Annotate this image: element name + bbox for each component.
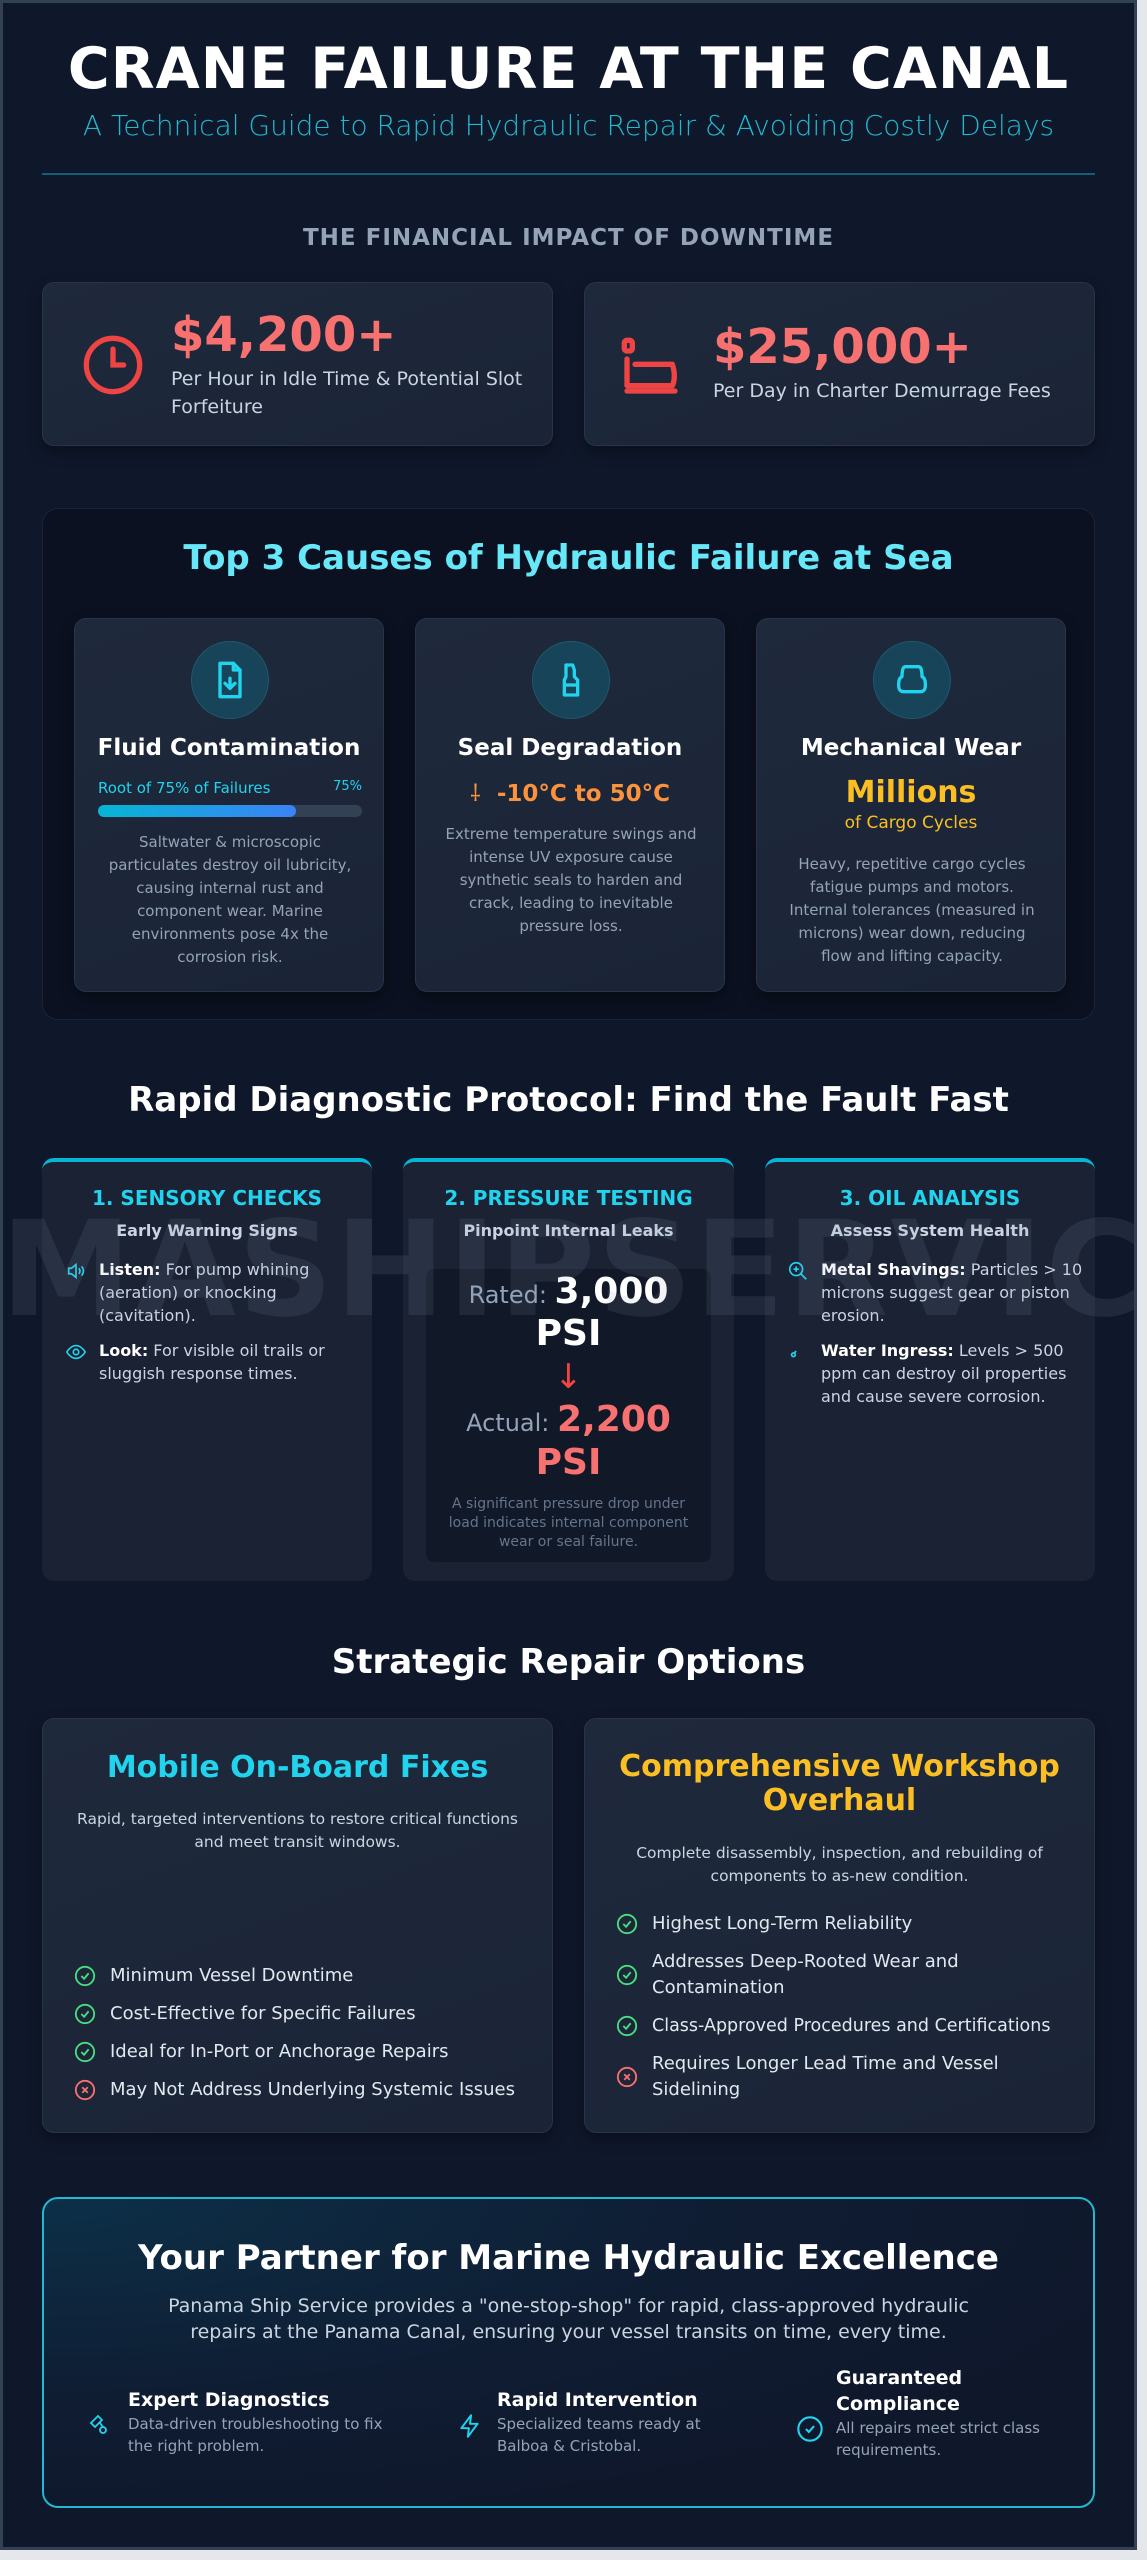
pros/cons list: [616, 1913, 1050, 2100]
stat text: [171, 307, 522, 418]
icon: bearing: [873, 641, 951, 719]
icon: file: [191, 641, 269, 719]
pros/cons list: [74, 1965, 515, 2100]
feature: intervention: Rapid Intervention: [497, 2389, 698, 2411]
pros/cons list: Addresses Deep-Rooted Wear and Contamination: [652, 1951, 959, 1998]
card: mobile fixes: Mobile On-Board Fixes: [107, 1750, 488, 1785]
pressure readings: ↓: [554, 1357, 583, 1397]
feature: diagnostics: Data-driven troubleshooting to fix the right problem.: [128, 2415, 382, 2455]
feature: intervention: [460, 2389, 701, 2455]
card: mechanical wear: Mechanical Wear: [801, 735, 1021, 761]
card: pressure testing: Pinpoint Internal Leaks: [463, 1221, 674, 1240]
feature: diagnostics: [90, 2389, 382, 2455]
progress bar: Root of 75% of Failures: [98, 779, 270, 797]
pros/cons list: Cost-Effective for Specific Failures: [110, 2003, 416, 2024]
icon: bottle: [532, 641, 610, 719]
heading: repair options: Strategic Repair Options: [332, 1642, 805, 1682]
card: pressure testing: [403, 1158, 734, 1581]
card: workshop overhaul: [584, 1718, 1095, 2133]
icon: clock: [84, 336, 142, 394]
card: workshop overhaul: Complete disassembly, inspection, and rebuilding of components to as-new condition.: [636, 1844, 1043, 1885]
heading: financial impact: THE FINANCIAL IMPACT OF DOWNTIME: [303, 225, 834, 251]
progress bar: 75%: [333, 779, 362, 794]
list: Metal Shavings: Particles > 10 microns suggest gear or piston erosion.: [821, 1260, 1082, 1325]
feature: compliance: Guaranteed Compliance: [836, 2367, 962, 2415]
feature: compliance: [797, 2367, 1040, 2459]
card: fluid contamination: Fluid Contamination: [98, 735, 360, 761]
card: mobile fixes: [42, 1718, 553, 2133]
card: mechanical wear: Heavy, repetitive cargo cycles fatigue pumps and motors. Internal tolerances (measured in microns) wear down, reducing flow and lifting capacity.: [789, 855, 1035, 965]
feature: compliance: All repairs meet strict class requirements.: [836, 2419, 1040, 2459]
progress bar: [98, 779, 362, 817]
pros/cons list: Minimum Vessel Downtime: [110, 1965, 353, 1986]
pros/cons list: Class-Approved Procedures and Certifications: [652, 2016, 1050, 2036]
card: oil analysis: Assess System Health: [831, 1221, 1029, 1240]
card: pressure testing: 2. PRESSURE TESTING: [444, 1186, 693, 1210]
list: Look: For visible oil trails or sluggish response times.: [99, 1341, 325, 1383]
stat card: hourly: [42, 282, 553, 446]
temperature range: ⸸ -10°C to 50°C: [470, 781, 670, 807]
list: [66, 1260, 325, 1383]
stat text: Per Day in Charter Demurrage Fees: [713, 380, 1051, 402]
card: fluid contamination: Saltwater & microscopic particulates destroy oil lubricity, causing internal rust and component wear. Marine environments pose 4x the corrosion risk.: [109, 833, 351, 966]
icon: ship: [622, 338, 678, 394]
feature: intervention: Specialized teams ready at Balboa & Cristobal.: [497, 2415, 701, 2455]
panel: partner: [42, 2197, 1095, 2508]
stat: millions: [845, 775, 977, 833]
pressure readings: PSI: [536, 1313, 601, 1354]
heading: Your Partner for Marine Hydraulic Excellence: [138, 2238, 999, 2278]
pros/cons list: Requires Longer Lead Time and Vessel Sidelining: [652, 2053, 999, 2100]
pressure readings: [426, 1269, 711, 1562]
intro text: Panama Ship Service provides a "one-stop-shop" for rapid, class-approved hydraulic repairs at the Panama Canal, ensuring your vessel transits on time, every time.: [168, 2295, 969, 2343]
heading: Top 3 Causes of Hydraulic Failure at Sea: [183, 538, 954, 578]
list: [788, 1260, 1082, 1406]
card: oil analysis: [765, 1158, 1095, 1581]
card: seal degradation: Extreme temperature swings and intense UV exposure cause synthetic seals to harden and crack, leading to inevitable pressure loss.: [445, 825, 697, 935]
heading: diagnostic: Rapid Diagnostic Protocol: Find the Fault Fast: [128, 1080, 1009, 1120]
card: seal degradation: [415, 618, 725, 992]
stat text: $25,000+: [713, 319, 972, 375]
title: CRANE FAILURE AT THE CANAL: [68, 36, 1069, 102]
card: sensory checks: [42, 1158, 372, 1581]
pros/cons list: Ideal for In-Port or Anchorage Repairs: [110, 2041, 448, 2062]
stat text: [713, 319, 1051, 402]
card: workshop overhaul: Comprehensive Workshop Overhaul: [619, 1749, 1060, 1818]
card: sensory checks: 1. SENSORY CHECKS: [92, 1186, 322, 1210]
pros/cons list: Highest Long-Term Reliability: [652, 1913, 912, 1934]
card: oil analysis: 3. OIL ANALYSIS: [840, 1186, 1020, 1210]
stat card: daily: [584, 282, 1095, 446]
card: fluid contamination: [74, 618, 384, 992]
card: mechanical wear: [756, 618, 1066, 992]
pressure readings: Actual: 2,200: [466, 1399, 671, 1440]
card: seal degradation: Seal Degradation: [458, 735, 682, 761]
stat: millions: Millions: [846, 775, 976, 810]
feature: diagnostics: Expert Diagnostics: [128, 2389, 330, 2411]
pressure readings: PSI: [536, 1442, 601, 1483]
card: mobile fixes: Rapid, targeted interventions to restore critical functions and meet transit windows.: [77, 1810, 518, 1851]
list: Water Ingress: Levels > 500 ppm can destroy oil properties and cause severe corrosion.: [821, 1341, 1066, 1406]
pressure readings: A significant pressure drop under load indicates internal component wear or seal failure.: [449, 1496, 688, 1550]
card: sensory checks: Early Warning Signs: [116, 1221, 298, 1240]
stat text: Per Hour in Idle Time & Potential Slot Forfeiture: [171, 368, 522, 418]
pros/cons list: May Not Address Underlying Systemic Issues: [110, 2079, 515, 2100]
panel: causes: [42, 508, 1095, 1020]
pressure readings: Rated: 3,000: [469, 1271, 668, 1312]
list: Listen: For pump whining (aeration) or knocking (cavitation).: [99, 1260, 309, 1325]
stat: millions: of Cargo Cycles: [845, 813, 977, 833]
stat text: $4,200+: [171, 307, 396, 363]
subtitle: A Technical Guide to Rapid Hydraulic Repair & Avoiding Costly Delays: [83, 109, 1054, 142]
